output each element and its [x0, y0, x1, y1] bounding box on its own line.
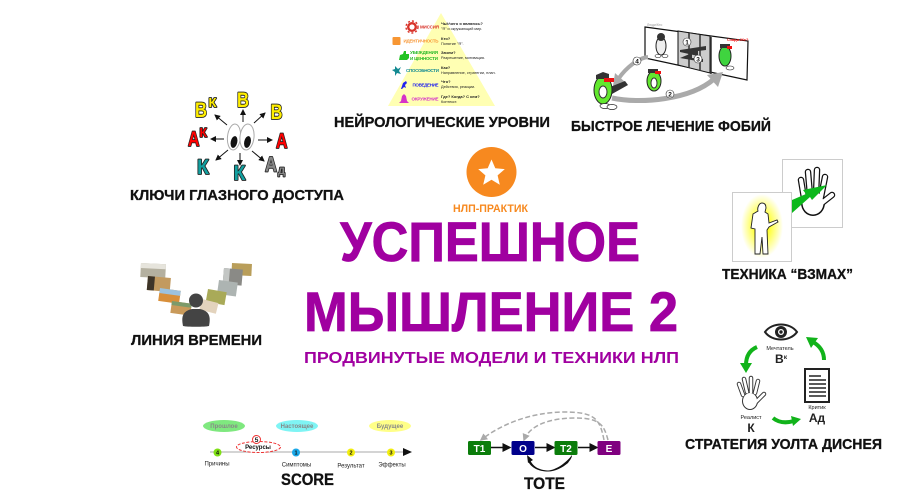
icon: eye	[765, 324, 797, 340]
timeline nodes	[214, 448, 395, 456]
realist caption: К	[747, 421, 755, 435]
level questions: Понятие "Я".	[441, 42, 464, 46]
panel: time line	[131, 263, 262, 349]
return loop	[527, 455, 572, 472]
card: hand	[782, 160, 842, 228]
character in exit frame	[719, 44, 734, 70]
heading: ТЕХНИКА “ВЗМАХ”	[722, 266, 853, 283]
timeline	[210, 448, 412, 456]
level names: ПОВЕДЕНИЕ	[412, 82, 438, 88]
large character	[594, 72, 628, 110]
small character	[647, 69, 661, 91]
eye cue letters: А	[276, 130, 288, 153]
badge: НЛП-практик	[453, 147, 528, 215]
level questions: Контекст.	[441, 100, 457, 104]
panel: swish technique	[722, 160, 853, 283]
panel: TOTE	[468, 412, 620, 493]
eye cue letters: В	[270, 101, 282, 124]
eye direction arrows	[211, 110, 272, 165]
main title: МЫШЛЕНИЕ 2	[304, 280, 678, 343]
main title: УСПЕШНОЕ	[340, 210, 640, 273]
boxes	[468, 441, 620, 455]
level questions	[441, 21, 496, 104]
panel: fast phobia cure	[571, 23, 771, 135]
node captions	[204, 462, 406, 470]
step numbers: 2	[668, 92, 672, 98]
eye cue letters: К	[234, 162, 246, 185]
subtitle: ПРОДВИНУТЫЕ МОДЕЛИ И ТЕХНИКИ НЛП	[304, 350, 679, 367]
level questions: Кто?	[441, 36, 451, 41]
node captions: Эффекты	[378, 462, 406, 468]
eye cue letters: К	[200, 125, 207, 140]
resource callout	[236, 436, 280, 452]
heading: TOTE	[524, 475, 565, 493]
level questions: Чьё/чего я являюсь?	[441, 21, 483, 26]
time ovals: Прошлое	[210, 424, 238, 430]
character on screen	[655, 33, 668, 58]
eye cue letters: А	[265, 154, 277, 176]
node captions: Причины	[204, 462, 230, 468]
panel: eye accessing cues	[130, 89, 344, 204]
icon: person silhouette	[182, 294, 210, 327]
green cycle arrows	[740, 337, 824, 426]
level questions: Направление, стратегии, план.	[441, 71, 496, 75]
grey arrows	[612, 46, 723, 101]
dreamer caption	[766, 346, 794, 366]
badge: НЛП-практик: НЛП-ПРАКТИК	[453, 203, 528, 215]
panel: SCORE	[203, 420, 412, 489]
dreamer caption: к	[784, 354, 788, 361]
flow arrows	[491, 446, 597, 448]
boxes: E	[606, 444, 613, 455]
boxes: T1	[474, 444, 486, 455]
level names: МИССИЯ	[420, 24, 439, 30]
green swish arrow	[792, 185, 827, 213]
heading: ЛИНИЯ ВРЕМЕНИ	[131, 332, 262, 349]
timeline nodes: 3	[389, 450, 393, 456]
film strip: Сзади Же?	[727, 37, 749, 42]
critic caption: Критик	[808, 405, 826, 411]
node captions: Симптомы	[282, 462, 311, 468]
level questions: Разрешение, мотивация.	[441, 56, 485, 60]
photo fan	[140, 263, 252, 316]
time ovals: Будущее	[377, 424, 404, 430]
dreamer caption: В	[775, 352, 784, 366]
critic caption	[808, 405, 826, 425]
level questions: Как?	[441, 65, 451, 70]
level questions: Что?	[441, 79, 451, 84]
eye cue letters: В	[237, 89, 249, 112]
dreamer caption: Мечтатель	[766, 346, 794, 352]
time ovals	[203, 420, 411, 432]
step numbers: 3	[696, 56, 700, 64]
eye cue letters: К	[208, 95, 217, 110]
film strip: Люди/Кто	[647, 23, 662, 27]
boxes: T2	[560, 444, 572, 455]
main title	[304, 210, 678, 343]
film strip	[645, 23, 749, 80]
timeline nodes: 1	[294, 450, 298, 456]
level names: ИДЕНТИЧНОСТЬ	[404, 38, 439, 44]
step numbers: 1	[685, 40, 689, 46]
node captions: Результат	[337, 464, 365, 470]
eye cue letters: К	[197, 156, 209, 179]
level names: И ЦЕННОСТИ	[410, 56, 438, 61]
eye cue letters: В	[195, 99, 207, 122]
step numbers	[633, 38, 702, 98]
resource callout: 5	[255, 437, 259, 444]
timeline nodes: 2	[349, 450, 353, 456]
level questions: Действия, реакции.	[441, 85, 475, 89]
icon: document	[805, 369, 829, 402]
heading: СТРАТЕГИЯ УОЛТА ДИСНЕЯ	[685, 436, 882, 453]
level names: УБЕЖДЕНИЯ	[410, 50, 438, 55]
heading: SCORE	[281, 471, 334, 489]
heading: НЕЙРОЛОГИЧЕСКИЕ УРОВНИ	[334, 113, 550, 131]
heading: БЫСТРОЕ ЛЕЧЕНИЕ ФОБИЙ	[571, 117, 771, 135]
eye cue letters: д	[278, 163, 285, 177]
icon: eyes	[226, 123, 255, 151]
level names: СПОСОБНОСТИ	[406, 68, 439, 73]
card: person	[732, 192, 792, 262]
level questions: "Я" и окружающий мир.	[441, 27, 482, 31]
critic caption: Ад	[809, 411, 826, 425]
level icons	[392, 21, 418, 103]
panel: Walt Disney strategy	[685, 324, 882, 453]
realist caption: Реалист	[740, 415, 762, 421]
level questions: Где? Когда? С кем?	[441, 94, 480, 99]
icon: hand	[739, 378, 764, 410]
feedback dashes	[481, 412, 608, 440]
eye cue letters	[188, 89, 288, 185]
boxes: O	[519, 444, 527, 455]
timeline nodes: 4	[216, 450, 220, 456]
resource callout: Ресурсы	[245, 445, 271, 451]
realist caption	[740, 415, 762, 435]
level questions: Зачем?	[441, 50, 456, 55]
time ovals: Настоящее	[281, 424, 314, 430]
heading: КЛЮЧИ ГЛАЗНОГО ДОСТУПА	[130, 187, 344, 204]
panel: neurological levels	[334, 13, 550, 131]
pyramid	[388, 13, 495, 106]
level names: ОКРУЖЕНИЕ	[412, 96, 438, 102]
level names	[404, 24, 439, 102]
eye cue letters: А	[188, 128, 200, 151]
step numbers: 4	[635, 58, 639, 66]
